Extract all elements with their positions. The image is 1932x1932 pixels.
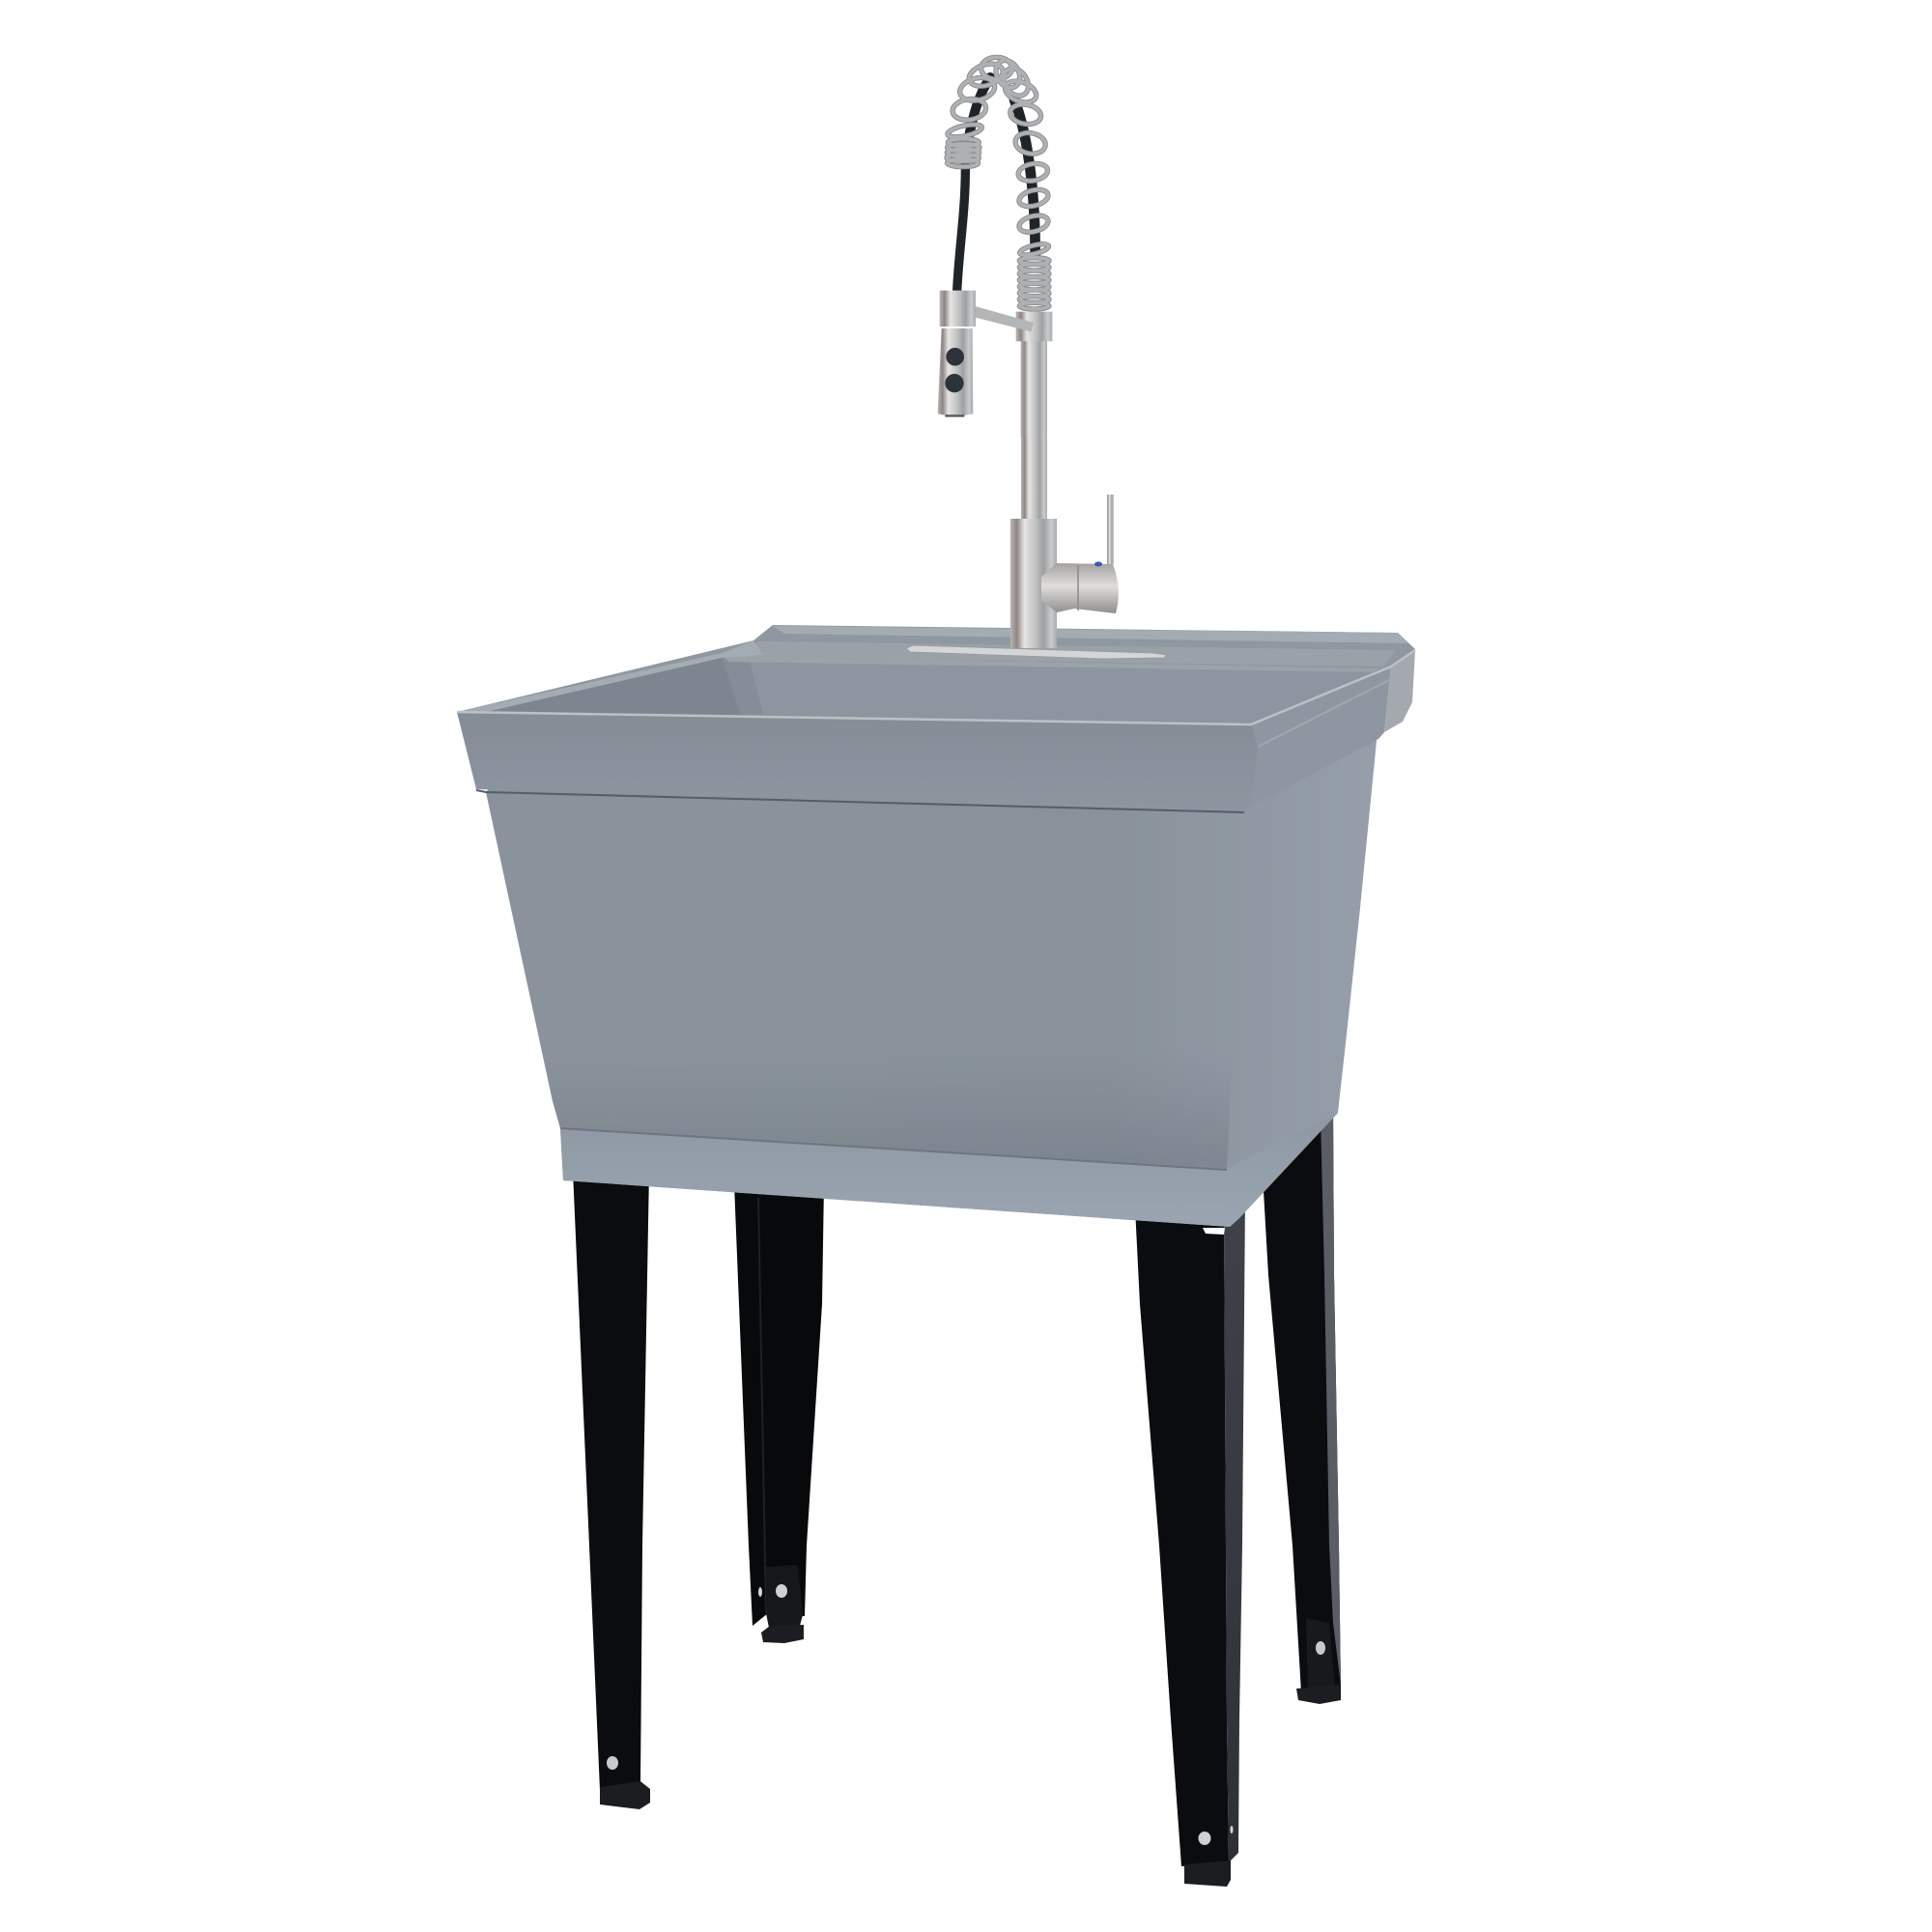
- basin inner wall: [486, 656, 1378, 724]
- mixer hub: [1041, 562, 1119, 613]
- faucet: [906, 56, 1167, 659]
- legs: [573, 1106, 1341, 1887]
- sink tub: [457, 625, 1415, 1227]
- rim left bevel: [457, 640, 763, 712]
- lever handle: [1107, 495, 1114, 564]
- upper column: [1021, 338, 1047, 522]
- spring coil: [947, 56, 1050, 309]
- spout tube: [1021, 341, 1047, 438]
- body front and side: [486, 720, 1377, 1227]
- leg: back left: [734, 1183, 824, 1643]
- holster arm: [974, 306, 1034, 331]
- right end flange: [1384, 650, 1415, 732]
- leg: back right: [1251, 1106, 1341, 1704]
- front rim band: [457, 712, 1258, 811]
- faucet body: [1010, 519, 1057, 648]
- right rim side face: [1244, 667, 1391, 811]
- body lower shading: [486, 792, 1244, 1169]
- hose: [957, 77, 1036, 292]
- pull-down spray hose and spring: [938, 56, 1052, 438]
- bottom band: [560, 1113, 1338, 1227]
- back deck: [457, 625, 1415, 726]
- spring collar: [1016, 312, 1052, 341]
- spray head: [938, 328, 973, 417]
- leg: front right: [1135, 1198, 1245, 1887]
- leg: front left: [573, 1171, 650, 1809]
- spray head mount: [940, 291, 976, 327]
- faucet base plate: [906, 645, 1167, 659]
